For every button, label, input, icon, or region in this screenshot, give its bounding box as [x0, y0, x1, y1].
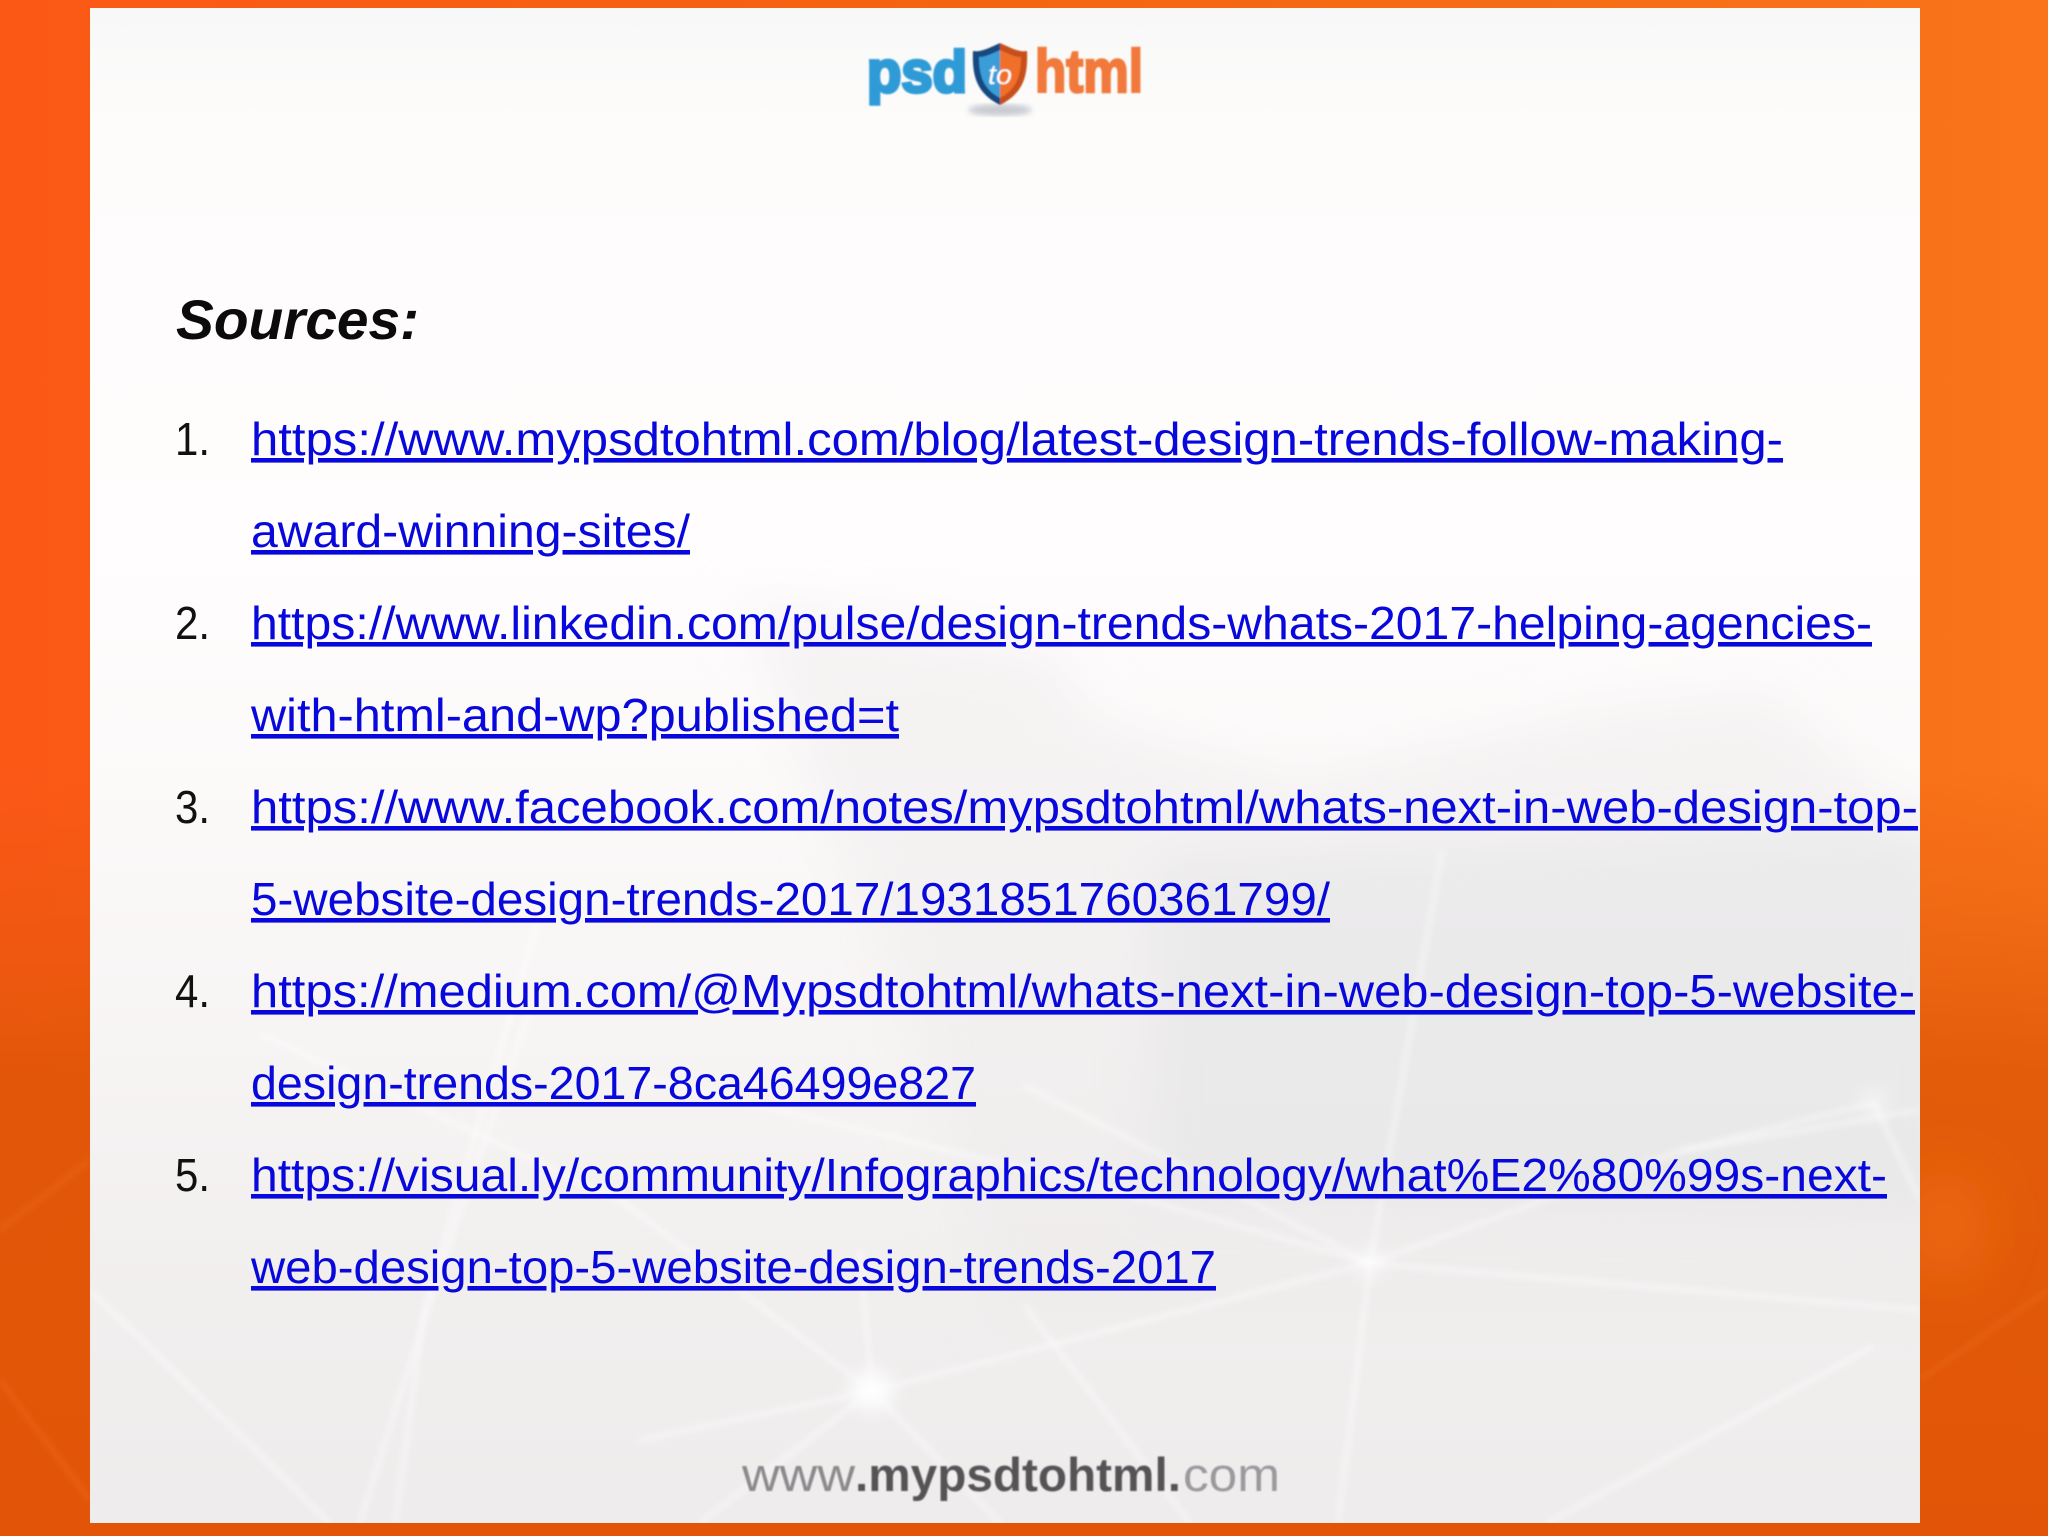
source 4: https://medium.com/@Mypsdtohtml/whats-next-in-web-design-top-5-website-: [251, 965, 1915, 1017]
source 2: [175, 597, 1872, 741]
logo wordmark: html: html: [1035, 38, 1143, 105]
source 2: with-html-and-wp?published=t: [250, 689, 899, 741]
logo shield: [973, 43, 1027, 105]
source 3: 3.: [175, 781, 210, 833]
source 3: [175, 781, 1918, 925]
footer website address: www: [741, 1448, 856, 1501]
source 1: 1.: [175, 413, 210, 465]
source 4: design-trends-2017-8ca46499e827: [251, 1057, 976, 1109]
source 1: [175, 413, 1783, 557]
source 2: 2.: [175, 597, 210, 649]
source 1: https://www.mypsdtohtml.com/blog/latest-design-trends-follow-making-: [251, 413, 1783, 465]
logo: psd to html: [867, 38, 1143, 116]
heading: Sources: Sources:: [176, 288, 419, 351]
source 5: web-design-top-5-website-design-trends-2017: [250, 1241, 1216, 1293]
source 4: 4.: [175, 965, 210, 1017]
source 4: [175, 965, 1915, 1109]
logo wordmark: psd: psd: [867, 40, 967, 105]
footer website address: com: [1183, 1448, 1280, 1501]
source 5: [175, 1149, 1887, 1293]
logo shadow: [968, 104, 1032, 116]
source 1: award-winning-sites/: [251, 505, 690, 557]
source 5: https://visual.ly/community/Infographics/technology/what%E2%80%99s-next-: [251, 1149, 1887, 1201]
footer website address: .mypsdtohtml.: [855, 1448, 1181, 1501]
source 3: 5-website-design-trends-2017/1931851760361799/: [251, 873, 1330, 925]
logo shield: to: [988, 59, 1012, 90]
source 2: https://www.linkedin.com/pulse/design-trends-whats-2017-helping-agencies-: [251, 597, 1872, 649]
source 3: https://www.facebook.com/notes/mypsdtohtml/whats-next-in-web-design-top-: [251, 781, 1918, 833]
footer website address: [741, 1448, 1280, 1501]
source 5: 5.: [175, 1149, 210, 1201]
